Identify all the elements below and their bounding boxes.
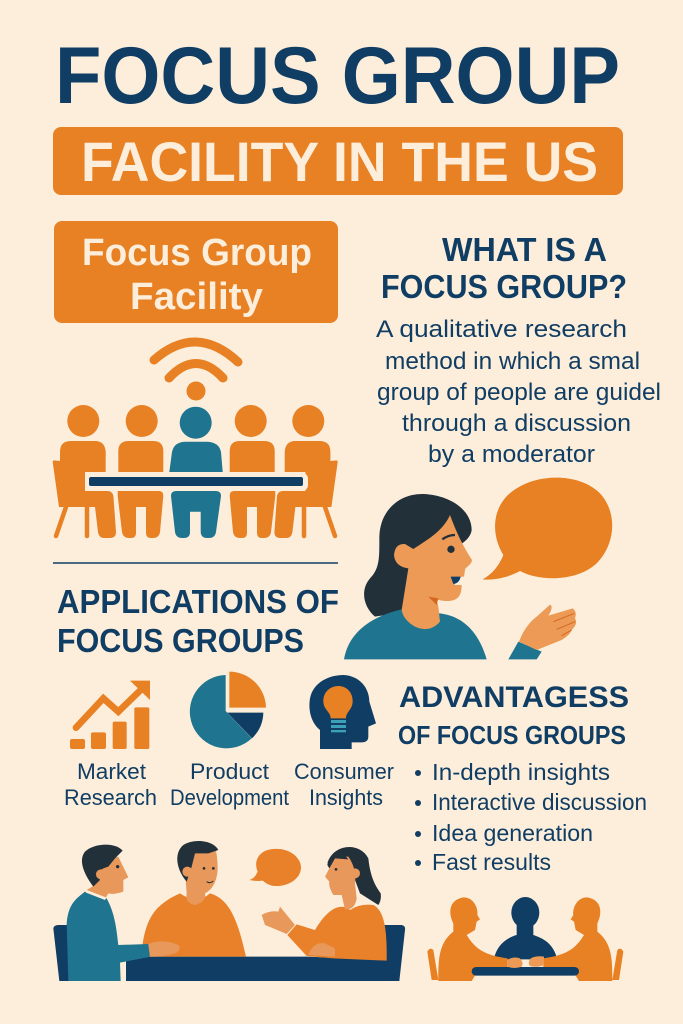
- heading: advantages of focus groups: ADVANTAGESS: [399, 681, 629, 714]
- label: market research: Research: [64, 785, 157, 810]
- heading: what is a focus group: WHAT IS A: [442, 231, 607, 268]
- shirt: [344, 609, 487, 659]
- label: consumer insights: Insights: [309, 785, 383, 810]
- list: advantages: In-depth insights: [432, 759, 610, 785]
- heading: applications of focus groups: APPLICATIONS OF: [57, 583, 339, 620]
- woman right: [262, 847, 387, 961]
- speech bubble: [483, 478, 612, 580]
- title: FOCUS GROUP: [55, 31, 620, 121]
- man center: [143, 841, 246, 957]
- label: product development: Development: [170, 785, 289, 810]
- banner: facility in the US: FACILITY IN THE US: [81, 130, 598, 193]
- text block: definition: by a moderator: [428, 441, 595, 468]
- label: consumer insights: Consumer: [294, 759, 394, 784]
- chairs and table: [53, 925, 405, 981]
- hand and sleeve: [508, 642, 542, 659]
- panel: focus group facility label: Focus Group: [82, 232, 312, 274]
- left participant: [438, 897, 507, 981]
- text block: definition: [376, 316, 661, 468]
- small speech bubble: [249, 849, 301, 886]
- moderator silhouette: [494, 897, 557, 959]
- list: advantages: [415, 759, 647, 875]
- list: advantages: Fast results: [432, 849, 551, 875]
- hair: [364, 494, 472, 617]
- table: [472, 967, 579, 976]
- people around table: [53, 405, 338, 538]
- illustration: three people talking at a table: [53, 841, 405, 981]
- icon: market research chart: [70, 681, 150, 749]
- face and neck: [394, 515, 472, 629]
- icon: consumer insights head with bulb: [309, 675, 376, 749]
- text block: definition: A qualitative research: [376, 316, 627, 343]
- divider: [53, 562, 338, 564]
- label: consumer insights: [294, 759, 394, 810]
- heading: what is a focus group: [381, 231, 627, 305]
- icon: woman talking with speech bubble: [344, 478, 612, 659]
- label: product development: [170, 759, 289, 810]
- icon: silhouettes at a table: [427, 897, 623, 981]
- label: market research: [64, 759, 157, 810]
- label: product development: Product: [190, 759, 269, 784]
- panel: focus group facility label: Facility: [130, 276, 263, 318]
- heading: advantages of focus groups: OF FOCUS GROUPS: [398, 720, 626, 750]
- icon: wifi signal: [154, 342, 238, 400]
- hands: [507, 957, 523, 968]
- right participant: [543, 897, 612, 981]
- heading: applications of focus groups: FOCUS GROUPS: [57, 622, 304, 659]
- man left: [67, 845, 180, 981]
- chairs: [427, 949, 438, 980]
- heading: advantages of focus groups: [398, 681, 629, 750]
- list: advantages: Idea generation: [432, 820, 593, 846]
- icon: product development pie chart: [190, 672, 266, 748]
- text block: definition: method in which a smal: [385, 348, 640, 375]
- icon: meeting table with wifi signal: [53, 342, 338, 538]
- label: market research: Market: [77, 759, 146, 784]
- moderator: [169, 407, 223, 538]
- table: [85, 473, 308, 491]
- text block: definition: through a discussion: [402, 410, 631, 437]
- heading: applications of focus groups: [57, 583, 339, 659]
- text block: definition: group of people are guidel: [377, 379, 661, 406]
- heading: what is a focus group: FOCUS GROUP?: [381, 268, 627, 305]
- panel: focus group facility label: [54, 221, 338, 323]
- list: advantages: Interactive discussion: [432, 789, 647, 815]
